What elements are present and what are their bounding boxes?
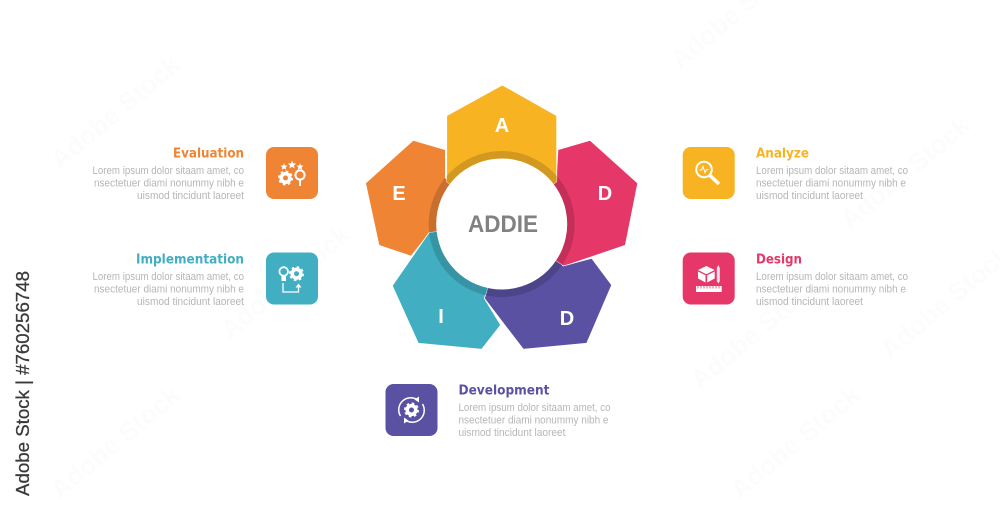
petal: D pink: D	[598, 183, 612, 205]
watermark text: Adobe Stock	[685, 269, 826, 395]
text: Design body: nsectetuer diami nonummy nibh e	[756, 284, 906, 296]
text: Evaluation body	[92, 165, 244, 202]
item: Development	[386, 384, 610, 439]
petal: E orange: E	[392, 183, 406, 205]
text: Design body	[756, 271, 908, 308]
center label: ADDIE	[468, 211, 538, 238]
text: Implementation body: nsectetuer diami nonummy nibh e	[94, 284, 244, 296]
icon: bulb and gear	[266, 252, 318, 304]
watermark text: Adobe Stock	[45, 49, 186, 175]
petal: I teal: I	[438, 306, 444, 328]
item: Implementation	[92, 252, 318, 308]
watermark text: Adobe Stock	[45, 379, 186, 505]
heading: Analyze: Analyze	[756, 146, 809, 162]
text: Design body: uismod tincidunt laoreet	[756, 296, 863, 308]
icon: magnifier with pulse	[683, 147, 735, 199]
heading: Evaluation: Evaluation	[173, 146, 244, 162]
text: Analyze body: uismod tincidunt laoreet	[756, 190, 863, 202]
text: Analyze body: Lorem ipsum dolor sitaam amet, co	[756, 165, 908, 177]
text: Development body: nsectetuer diami nonummy nibh e	[458, 414, 608, 426]
text: Analyze body: nsectetuer diami nonummy nibh e	[756, 178, 906, 190]
petal: A yellow: A	[495, 115, 509, 137]
text: Development body	[458, 402, 610, 439]
petal: D purple	[484, 258, 612, 349]
center circle	[436, 158, 567, 290]
item: Design	[683, 252, 908, 308]
text: Development body: uismod tincidunt laoreet	[458, 427, 566, 439]
petal: I teal	[392, 231, 500, 349]
text: Evaluation body: uismod tincidunt laoreet	[137, 190, 244, 202]
item: Analyze	[683, 146, 908, 202]
icon: cube, pencil and ruler	[683, 252, 735, 304]
heading: Design: Design	[756, 252, 802, 268]
heading: Implementation: Implementation	[136, 252, 244, 268]
watermark text: Adobe Stock	[725, 379, 866, 505]
text: Analyze body	[756, 165, 908, 202]
petal: A yellow	[446, 86, 558, 184]
heading: Development: Development	[458, 384, 550, 398]
item: Evaluation	[92, 146, 318, 202]
icon: stars, gear and magnifier	[266, 147, 318, 199]
text: Implementation body	[92, 271, 244, 308]
cycle diagram: ADDIE flower	[366, 85, 637, 349]
icon: gear with cycle arrows	[386, 384, 438, 436]
text: Evaluation body: nsectetuer diami nonummy nibh e	[94, 178, 244, 190]
side credit: Adobe Stock id: Adobe Stock | #760256748	[12, 271, 33, 496]
petal: E orange	[366, 140, 450, 256]
petal: D purple: D	[560, 308, 574, 330]
text: Implementation body: Lorem ipsum dolor sitaam amet, co	[92, 271, 244, 283]
petal: D pink	[554, 140, 638, 266]
watermark text: Adobe Stock	[215, 219, 356, 345]
text: Design body: Lorem ipsum dolor sitaam amet, co	[756, 271, 908, 283]
watermark text: Adobe Stock	[835, 109, 976, 235]
text: Evaluation body: Lorem ipsum dolor sitaam amet, co	[92, 165, 244, 177]
text: Development body: Lorem ipsum dolor sitaam amet, co	[458, 402, 610, 414]
text: Implementation body: uismod tincidunt laoreet	[137, 296, 244, 308]
